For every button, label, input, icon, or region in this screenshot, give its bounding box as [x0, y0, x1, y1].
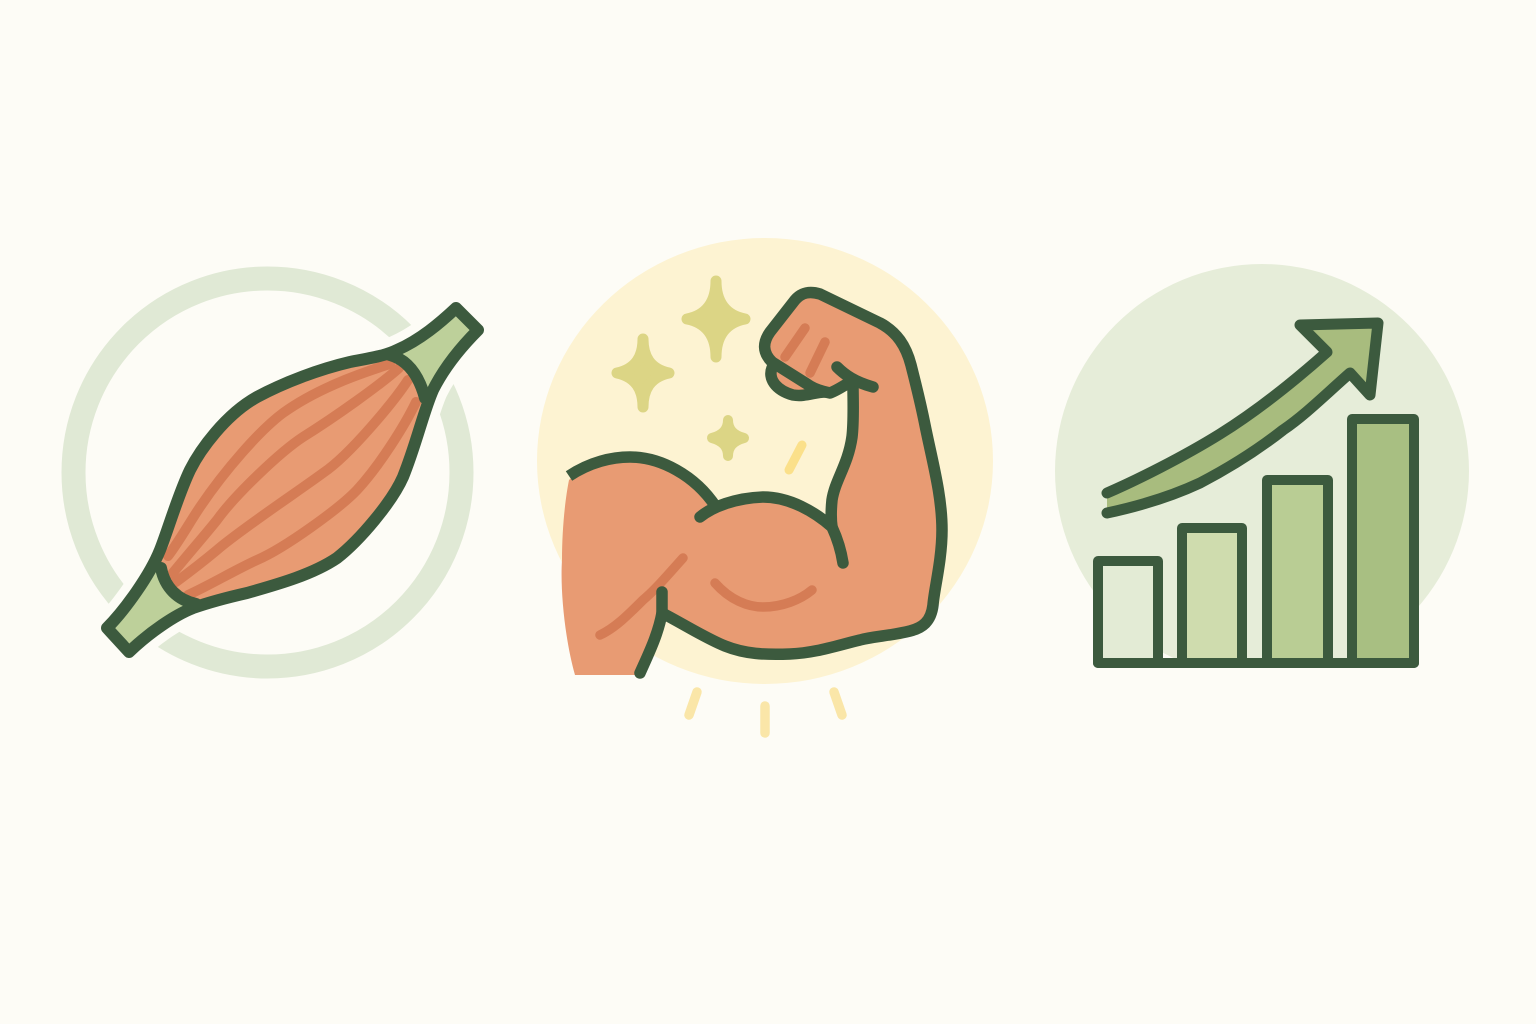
bar 3: [1267, 480, 1328, 663]
ring gap around the muscle: [107, 308, 478, 652]
tendons: [107, 308, 478, 652]
sparkle large: [687, 281, 745, 357]
sparkle small: [712, 420, 744, 456]
bar 1: [1098, 561, 1158, 663]
pale yellow circle: [537, 238, 993, 684]
icon: flexed arm with sparkles: [537, 238, 993, 733]
bar 4: [1352, 419, 1414, 663]
muscle belly: [160, 352, 424, 606]
icon: rising bar chart with arrow: [1055, 264, 1469, 678]
sparkle left: [617, 339, 669, 407]
baseline: [1098, 658, 1414, 668]
growth arrow fill: [1107, 323, 1378, 513]
tendon junction lower: [161, 568, 196, 604]
arm outline: [569, 292, 942, 673]
ring behind the muscle: [74, 278, 462, 666]
icon: muscle in a ring: [74, 278, 478, 666]
bar 2: [1182, 528, 1242, 663]
arm fill: [562, 292, 942, 675]
yellow dash: [789, 445, 802, 470]
tendon junction upper: [390, 355, 425, 398]
muscle fibres: [168, 364, 416, 595]
growth arrow outline: [1107, 323, 1378, 513]
illustration: three icons in a row: [62, 238, 1469, 738]
pale green circle: [1055, 264, 1469, 678]
rays below arm: [689, 692, 842, 733]
muscle outline: [107, 308, 478, 652]
arm creases: [600, 328, 825, 635]
